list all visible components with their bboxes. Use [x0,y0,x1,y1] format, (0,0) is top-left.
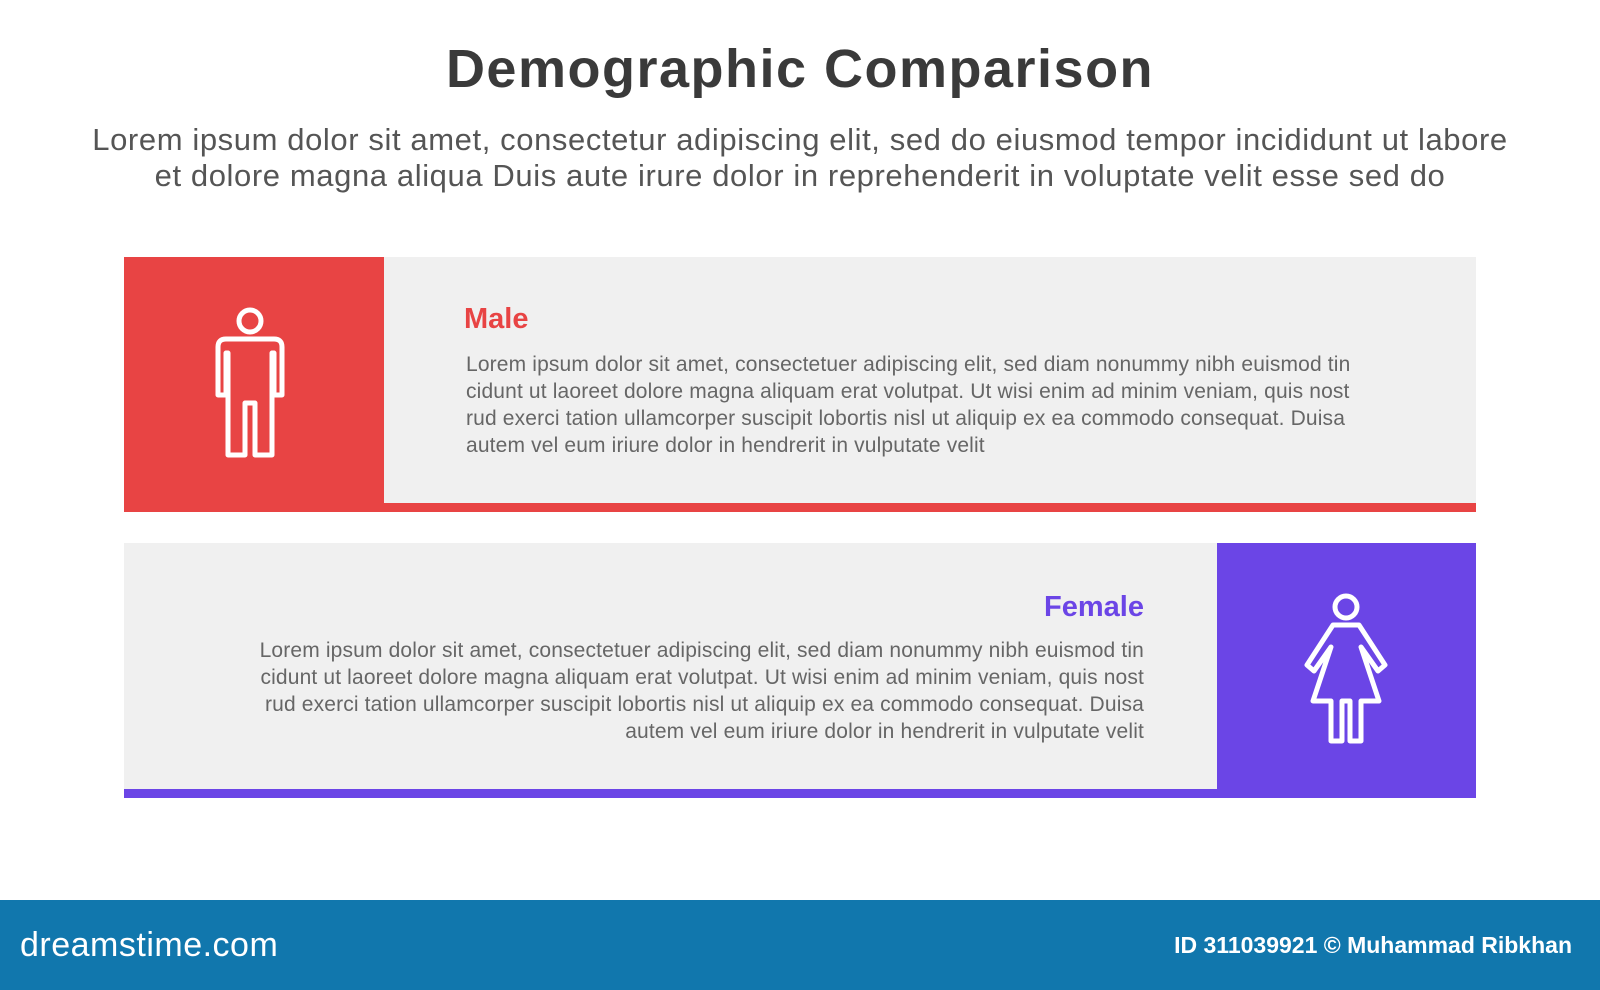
subtitle: et dolore magna aliqua Duis aute irure dolor in reprehenderit in voluptate velit esse sed do [155,158,1445,193]
male text: Lorem ipsum dolor sit amet, consectetuer adipiscing elit, sed diam nonummy nibh euismod tin [466,353,1350,376]
female text: autem vel eum iriure dolor in hendrerit in vulputate velit [625,720,1144,743]
male text: autem vel eum iriure dolor in hendrerit in vulputate velit [466,434,985,457]
male text [466,353,1350,457]
panel: female [124,543,1476,798]
male text: cidunt ut laoreet dolore magna aliquam erat volutpat. Ut wisi enim ad minim veniam, quis nost [466,380,1350,403]
female text: rud exerci tation ullamcorper suscipit lobortis nisl ut aliquip ex ea commodo consequat. Duisa [265,693,1144,716]
panel: male [124,257,1476,512]
male text: rud exerci tation ullamcorper suscipit lobortis nisl ut aliquip ex ea commodo consequat. Duisa [466,407,1345,430]
subtitle [92,122,1508,193]
female bottom bar [124,789,1476,798]
female text: Lorem ipsum dolor sit amet, consectetuer adipiscing elit, sed diam nonummy nibh euismod tin [260,639,1144,662]
female heading: Female [1044,591,1144,623]
subtitle: Lorem ipsum dolor sit amet, consectetur adipiscing elit, sed do eiusmod tempor incididunt ut labore [92,122,1508,157]
male heading: Male [464,303,528,335]
female text: cidunt ut laoreet dolore magna aliquam erat volutpat. Ut wisi enim ad minim veniam, quis nost [260,666,1144,689]
female icon box [1217,543,1476,798]
female text [260,639,1144,743]
footer [0,900,1600,990]
icon: male [216,308,284,458]
footer logo: dreamstime.com [20,926,278,964]
icon: female [1304,594,1388,744]
male icon box [124,257,384,512]
footer credit: ID 311039921 © Muhammad Ribkhan [1174,932,1572,958]
title: Demographic Comparison [446,39,1154,99]
male bottom bar [124,503,1476,512]
